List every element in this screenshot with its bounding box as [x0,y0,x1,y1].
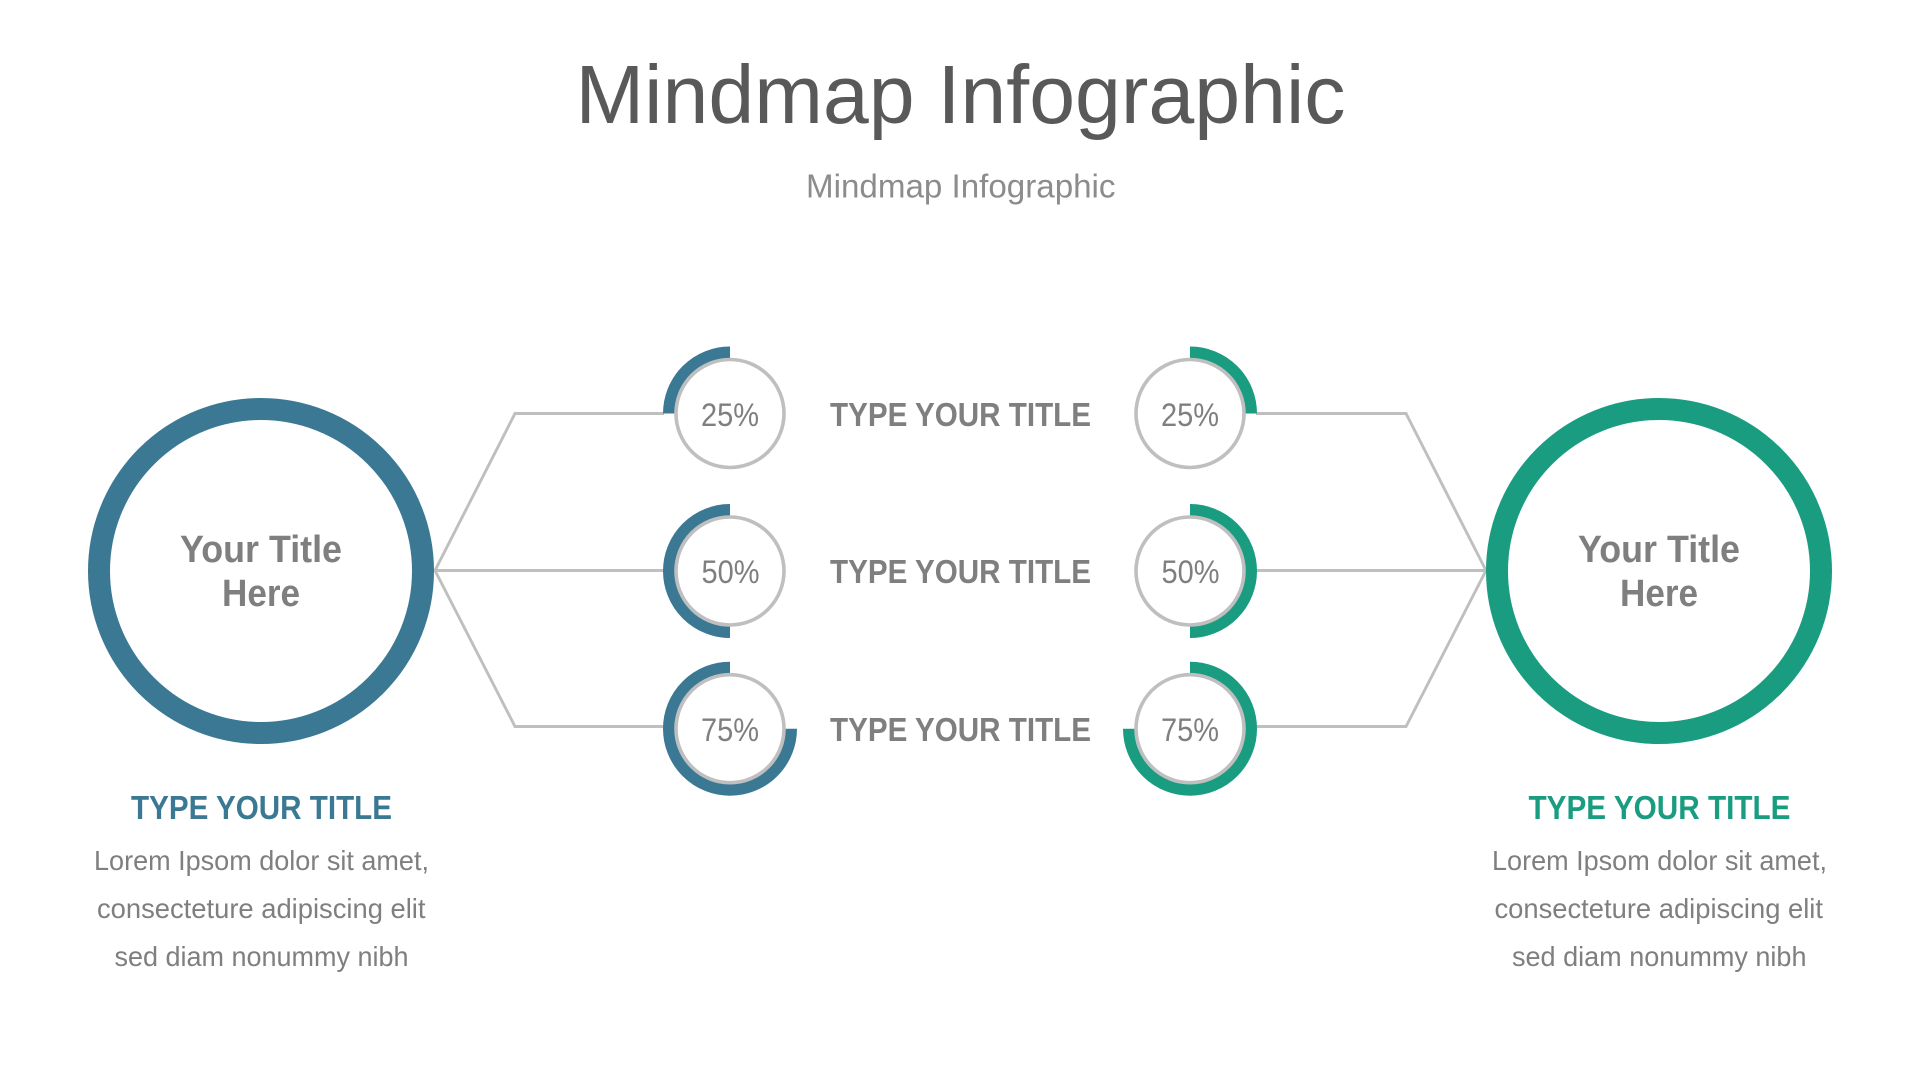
right main circle [1497,409,1821,733]
right description: sed diam nonummy nibh [1512,941,1806,972]
right progress 25%: 25% [1161,397,1219,433]
left description [94,845,429,972]
left main circle title [180,529,342,615]
left main circle [99,409,423,733]
right description: consecteture adipiscing elit [1494,893,1823,924]
connector lines: left [435,414,664,726]
right progress 50% [1136,510,1251,632]
right main circle title: Here [1620,573,1698,615]
left description: Lorem Ipsom dolor sit amet, [94,845,429,876]
right main circle title [1578,529,1740,615]
right progress 25% [1136,352,1251,468]
right description: Lorem Ipsom dolor sit amet, [1492,845,1827,876]
center label row 2: TYPE YOUR TITLE [830,553,1091,590]
center label row 3: TYPE YOUR TITLE [830,711,1091,748]
right progress 75% [1129,668,1251,790]
right main circle title: Your Title [1578,529,1740,571]
right progress 75%: 75% [1161,712,1219,748]
left progress 25% [669,352,784,468]
left main circle title: Your Title [180,529,342,571]
left main circle title: Here [222,573,300,615]
connector lines: right [1256,414,1486,726]
left description: consecteture adipiscing elit [97,893,426,924]
left heading: TYPE YOUR TITLE [131,789,392,826]
right progress 50%: 50% [1162,554,1220,590]
center label row 1: TYPE YOUR TITLE [830,396,1091,433]
left progress 75% [669,668,791,790]
left progress 25%: 25% [701,397,759,433]
right description [1492,845,1827,972]
left progress 50%: 50% [702,554,760,590]
left progress 50% [669,510,784,632]
left progress 75%: 75% [701,712,759,748]
subtitle: Mindmap Infographic [806,168,1116,204]
right heading: TYPE YOUR TITLE [1528,789,1790,826]
left description: sed diam nonummy nibh [114,941,408,972]
title: Mindmap Infographic [576,48,1346,141]
